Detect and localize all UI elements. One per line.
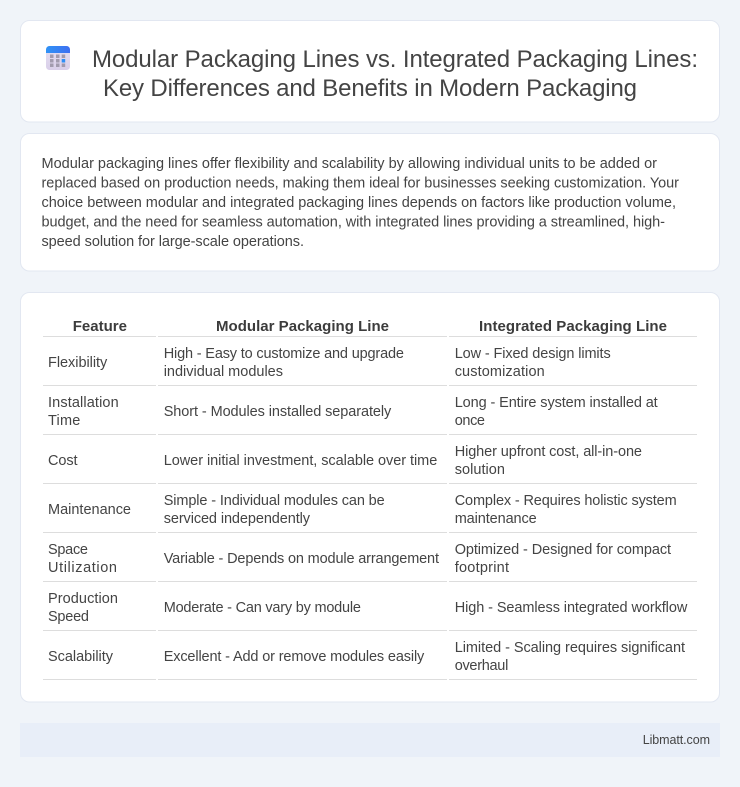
- title: Modular Packaging Lines vs. Integrated Packaging Lines:: [92, 46, 698, 73]
- row: production speed: High - Seamless integrated workflow: [455, 600, 688, 616]
- intro paragraph: budget, and the need for seamless automation, with integrated lines providing a streamlined, high-: [42, 214, 665, 230]
- row: space utilization: Optimized - Designed for compact: [455, 542, 671, 558]
- title: Key Differences and Benefits in Modern Packaging: [103, 75, 637, 102]
- row: flexibility: individual modules: [164, 364, 283, 380]
- row: scalability: [43, 640, 697, 680]
- row: maintenance: Maintenance: [48, 502, 131, 518]
- footer bar: [20, 723, 720, 757]
- table header row: Integrated Packaging Line: [479, 318, 667, 335]
- panel: comparison table: [20, 292, 720, 702]
- row: scalability: Scalability: [48, 649, 114, 665]
- row: installation time: Long - Entire system installed at: [455, 395, 658, 411]
- footer credit: Libmatt.com: [643, 733, 710, 747]
- row: installation time: [43, 395, 697, 435]
- row: maintenance: Complex - Requires holistic system: [455, 493, 677, 509]
- row: space utilization: Utilization: [48, 560, 117, 576]
- icon: calendar grid: [46, 46, 70, 70]
- row: cost: Higher upfront cost, all-in-one: [455, 444, 642, 460]
- row: installation time: Time: [48, 413, 80, 429]
- row: cost: Cost: [48, 453, 78, 469]
- panel: header: [20, 20, 720, 122]
- row: space utilization: Variable - Depends on module arrangement: [164, 551, 439, 567]
- table header row: [43, 318, 697, 337]
- intro paragraph: choice between modular and integrated packaging lines depends on factors like production volume,: [42, 195, 676, 211]
- intro paragraph: Modular packaging lines offer flexibility and scalability by allowing individual units to be added or: [42, 156, 657, 172]
- row: flexibility: customization: [455, 364, 545, 380]
- row: production speed: Speed: [48, 609, 89, 625]
- row: production speed: [43, 591, 697, 631]
- panel: introduction: [20, 134, 720, 271]
- title: [92, 46, 698, 102]
- row: maintenance: maintenance: [455, 511, 537, 527]
- row: space utilization: Space: [48, 542, 88, 558]
- row: cost: [43, 444, 697, 484]
- row: flexibility: Flexibility: [48, 355, 108, 371]
- intro paragraph: [42, 156, 679, 250]
- row: flexibility: High - Easy to customize and upgrade: [164, 346, 404, 362]
- row: cost: Lower initial investment, scalable over time: [164, 453, 437, 469]
- row: maintenance: [43, 493, 697, 533]
- row: space utilization: footprint: [455, 560, 509, 576]
- row: production speed: Moderate - Can vary by module: [164, 600, 361, 616]
- intro paragraph: speed solution for large-scale operations.: [42, 234, 304, 250]
- row: flexibility: Low - Fixed design limits: [455, 346, 611, 362]
- row: installation time: once: [455, 413, 485, 429]
- row: maintenance: Simple - Individual modules can be: [164, 493, 385, 509]
- row: installation time: Installation: [48, 395, 119, 411]
- row: scalability: overhaul: [455, 658, 508, 674]
- row: flexibility: [43, 346, 697, 386]
- row: maintenance: serviced independently: [164, 511, 311, 527]
- table header row: Feature: [73, 318, 127, 335]
- row: scalability: Limited - Scaling requires significant: [455, 640, 685, 656]
- row: installation time: Short - Modules installed separately: [164, 404, 392, 420]
- intro paragraph: replaced based on production needs, making them ideal for businesses seeking customization. Your: [42, 176, 679, 192]
- row: space utilization: [43, 542, 697, 582]
- row: cost: solution: [455, 462, 505, 478]
- row: production speed: Production: [48, 591, 118, 607]
- row: scalability: Excellent - Add or remove modules easily: [164, 649, 425, 665]
- table header row: Modular Packaging Line: [216, 318, 389, 335]
